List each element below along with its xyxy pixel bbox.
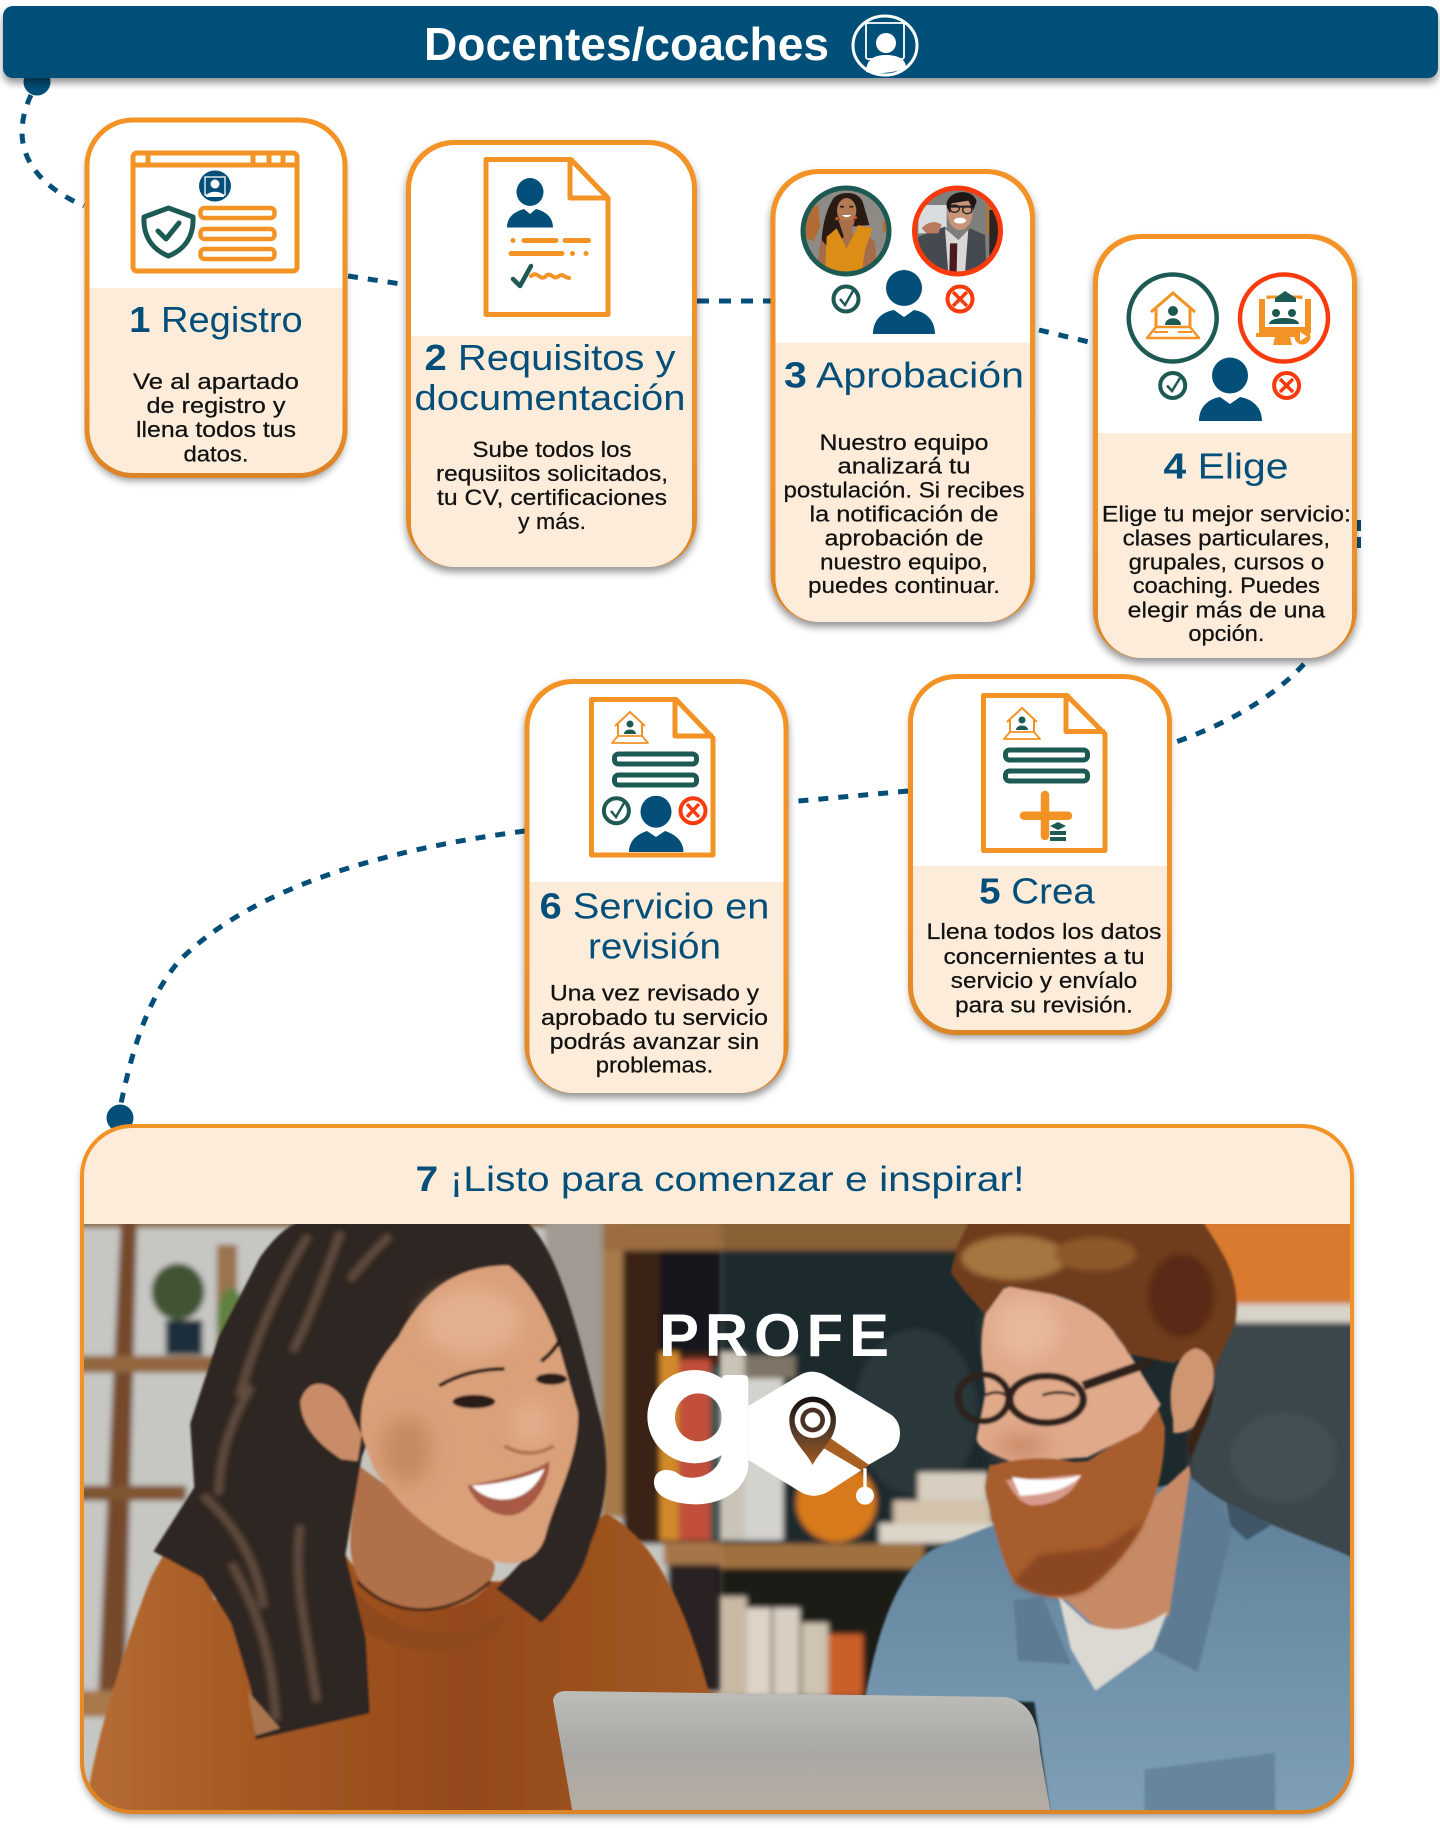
- connector: step 5 to step 6: [788, 791, 908, 802]
- woman smile: [468, 1461, 549, 1516]
- man t-shirt: [1059, 1597, 1167, 1691]
- body text: Ve al apartado: [133, 369, 299, 394]
- icon: home classes option: [1129, 274, 1217, 362]
- woman face: [361, 1265, 578, 1563]
- body text: tu CV, certificaciones: [437, 485, 667, 510]
- body text: llena todos tus: [136, 417, 296, 442]
- woman ear: [300, 1384, 362, 1461]
- heading: 1 Registro: [129, 299, 303, 340]
- body text: y más.: [518, 509, 586, 534]
- heading: 7 ¡Listo para comenzar e inspirar!: [416, 1160, 1024, 1199]
- woman neck: [350, 1465, 495, 1609]
- icon: cross: [948, 286, 972, 312]
- icon: document with profile: [486, 160, 608, 314]
- body text: servicio y envíalo: [951, 968, 1137, 993]
- man hair: [951, 1220, 1236, 1382]
- heading: 6 Servicio en: [540, 886, 769, 926]
- man shirt: [865, 1480, 1357, 1819]
- connector start dot: [24, 68, 50, 96]
- panel border: [82, 1126, 1352, 1812]
- body text: [926, 919, 1162, 1018]
- icon: cross: [1274, 373, 1299, 398]
- body text: nuestro equipo,: [820, 550, 988, 574]
- panel: step 2 requisitos: [406, 140, 697, 567]
- heading: 2 Requisitos y: [424, 337, 676, 378]
- photo left half: smiling woman: [72, 1216, 729, 1826]
- icon: teacher at board: [853, 16, 917, 75]
- body text: grupales, cursos o: [1129, 550, 1324, 574]
- connector: step 4 side fragment: [1357, 520, 1361, 552]
- laptop: [553, 1691, 1051, 1815]
- body text: podrás avanzar sin: [550, 1029, 759, 1054]
- body text: analizará tu: [838, 454, 970, 478]
- body text: opción.: [1188, 621, 1264, 646]
- connector: step 6 to step 7: [120, 831, 525, 1108]
- body text: para su revisión.: [955, 992, 1133, 1018]
- body text: elegir más de una: [1128, 598, 1326, 622]
- woman hair: [153, 1220, 606, 1740]
- body text: [436, 437, 668, 534]
- body text: [133, 369, 299, 466]
- body text: la notificación de: [810, 502, 998, 526]
- connector: step 3 to step 4: [1039, 330, 1093, 343]
- panel: step 6 servicio en revision: [524, 679, 788, 1093]
- heading: [540, 886, 769, 966]
- man glasses: [958, 1361, 1153, 1423]
- body text: Elige tu mejor servicio:: [1102, 502, 1351, 526]
- connector: step 2 to step 3: [697, 298, 772, 304]
- heading: 4 Elige: [1164, 446, 1288, 486]
- icon: person: [1199, 358, 1262, 421]
- connector: step 1 to step 2: [348, 276, 408, 285]
- body text: Llena todos los datos: [926, 919, 1162, 944]
- man beard: [985, 1393, 1165, 1596]
- icon: new service document: [984, 696, 1105, 850]
- header banner: [3, 6, 1438, 78]
- icon: check: [1160, 373, 1185, 398]
- man neck: [1047, 1465, 1196, 1638]
- man ear: [1171, 1348, 1214, 1433]
- connector: header to step 1: [22, 95, 84, 206]
- man smile: [1006, 1474, 1081, 1505]
- icon: online group classes option: [1240, 274, 1328, 362]
- logo mark: [647, 1370, 900, 1505]
- man collar: [1153, 1476, 1232, 1672]
- body text: clases particulares,: [1123, 526, 1330, 550]
- panel: step 7 listo: [72, 1126, 1365, 1826]
- photo: rejected candidate: [912, 183, 1005, 277]
- title: Docentes/coaches: [424, 18, 829, 70]
- panel: step 3 aprobacion: [770, 169, 1035, 622]
- body text: aprobación de: [824, 526, 984, 550]
- woman eyes: [439, 1339, 561, 1386]
- woman sweater: [84, 1514, 725, 1819]
- photo: approved candidate: [800, 183, 893, 277]
- body text: problemas.: [596, 1052, 713, 1078]
- icon: check: [834, 286, 858, 312]
- panel: step 4 elige: [1093, 234, 1357, 658]
- connector: step 4 to step 5: [1173, 664, 1304, 743]
- heading: 3 Aprobación: [784, 354, 1024, 396]
- body text: requsiitos solicitados,: [436, 461, 668, 486]
- body text: [541, 980, 768, 1078]
- body text: [784, 430, 1024, 598]
- photo right half: smiling man: [720, 1216, 1365, 1826]
- body text: Una vez revisado y: [550, 980, 759, 1006]
- icon: browser registration form: [133, 153, 297, 271]
- heading: revisión: [588, 926, 721, 966]
- heading: documentación: [414, 377, 686, 418]
- connector end dot: [106, 1104, 134, 1132]
- body text: concernientes a tu: [944, 944, 1144, 969]
- icon: service under review document: [592, 700, 713, 855]
- body text: postulación. Si recibes: [784, 478, 1024, 502]
- body text: datos.: [184, 442, 248, 466]
- photo: teachers at a laptop: [72, 1216, 1365, 1826]
- logo wordmark: PROFE: [659, 1302, 889, 1369]
- body text: Nuestro equipo: [820, 430, 988, 455]
- body text: aprobado tu servicio: [541, 1005, 768, 1030]
- panel: step 5 crea: [910, 676, 1170, 1032]
- body text: Sube todos los: [472, 437, 632, 462]
- body text: coaching. Puedes: [1133, 573, 1320, 598]
- panel: step 1 registro: [87, 120, 345, 476]
- body text: de registro y: [146, 393, 286, 418]
- man face: [977, 1286, 1161, 1461]
- heading: [414, 337, 686, 418]
- icon: person: [873, 270, 935, 334]
- heading: 5 Crea: [979, 870, 1096, 912]
- body text: puedes continuar.: [808, 573, 1000, 598]
- body text: [1102, 502, 1351, 646]
